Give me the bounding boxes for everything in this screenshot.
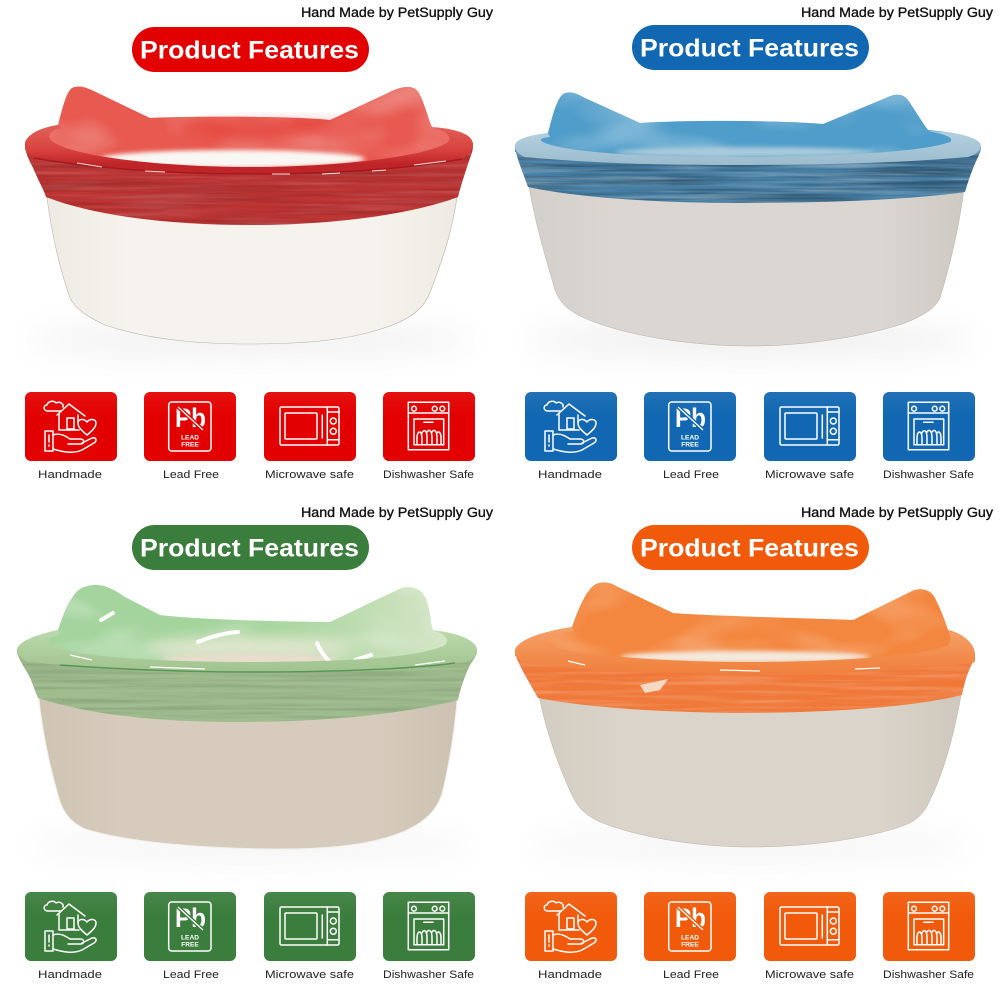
label: dishwasher safe: Dishwasher Safe <box>383 969 474 981</box>
icon: lead free: Pb <box>675 903 706 933</box>
blue cat ear bowl <box>510 90 985 356</box>
icon: lead free: LEAD <box>681 934 699 942</box>
label: lead free: Lead Free <box>663 469 719 481</box>
icon: lead free: FREE <box>181 442 199 448</box>
panel: orange bowl <box>510 505 993 981</box>
feature icons <box>525 392 975 481</box>
icon: microwave <box>264 892 356 961</box>
feature icons <box>25 892 475 981</box>
icon: lead free: LEAD <box>181 434 199 442</box>
icon: lead free: FREE <box>181 942 199 948</box>
label: handmade: Handmade <box>538 469 602 481</box>
icon: lead free: Pb <box>175 403 206 433</box>
icon: microwave <box>764 392 856 461</box>
label: microwave safe: Microwave safe <box>265 469 354 481</box>
icon: dishwasher <box>883 892 975 961</box>
icon: lead free <box>144 392 236 461</box>
icon: lead free: Pb <box>175 903 206 933</box>
label: dishwasher safe: Dishwasher Safe <box>883 469 974 481</box>
heading pill <box>132 525 369 570</box>
label: handmade: Handmade <box>38 469 102 481</box>
heading pill: Product Features <box>640 534 859 562</box>
label: microwave safe: Microwave safe <box>765 469 854 481</box>
icon: dishwasher <box>383 392 475 461</box>
label: lead free: Lead Free <box>163 969 219 981</box>
feature icons <box>525 892 975 981</box>
icon: lead free: FREE <box>681 942 699 948</box>
heading pill <box>132 27 369 72</box>
label: handmade: Handmade <box>38 969 102 981</box>
heading pill <box>632 525 869 570</box>
icon: lead free <box>644 892 736 961</box>
label: dishwasher safe: Dishwasher Safe <box>383 469 474 481</box>
label: microwave safe: Microwave safe <box>765 969 854 981</box>
icon: lead free: FREE <box>681 442 699 448</box>
icon: handmade <box>25 392 117 461</box>
icon: handmade <box>525 392 617 461</box>
icon: lead free: Pb <box>675 403 706 433</box>
heading pill: Product Features <box>140 534 359 562</box>
label: dishwasher safe: Dishwasher Safe <box>883 969 974 981</box>
feature icons <box>25 392 475 481</box>
label: lead free: Lead Free <box>163 469 219 481</box>
icon: lead free: LEAD <box>681 434 699 442</box>
icon: lead free <box>144 892 236 961</box>
heading pill: Product Features <box>140 36 359 64</box>
label: microwave safe: Microwave safe <box>265 969 354 981</box>
heading pill: Product Features <box>640 34 859 62</box>
maker credit: Hand Made by PetSupply Guy <box>801 5 993 20</box>
red cat ear bowl <box>20 85 480 356</box>
maker credit: Hand Made by PetSupply Guy <box>301 505 493 520</box>
icon: dishwasher <box>383 892 475 961</box>
icon: lead free <box>644 392 736 461</box>
icon: lead free: LEAD <box>181 934 199 942</box>
maker credit: Hand Made by PetSupply Guy <box>801 505 993 520</box>
panel: blue bowl <box>510 5 993 481</box>
icon: microwave <box>264 392 356 461</box>
icon: handmade <box>525 892 617 961</box>
heading pill <box>632 25 869 70</box>
green cat ear bowl <box>15 580 480 859</box>
orange cat ear bowl <box>510 578 980 859</box>
icon: microwave <box>764 892 856 961</box>
panel: green bowl <box>15 505 493 981</box>
icon: dishwasher <box>883 392 975 461</box>
icon: handmade <box>25 892 117 961</box>
panel: red bowl <box>20 5 493 481</box>
maker credit: Hand Made by PetSupply Guy <box>301 5 493 20</box>
label: lead free: Lead Free <box>663 969 719 981</box>
label: handmade: Handmade <box>538 969 602 981</box>
